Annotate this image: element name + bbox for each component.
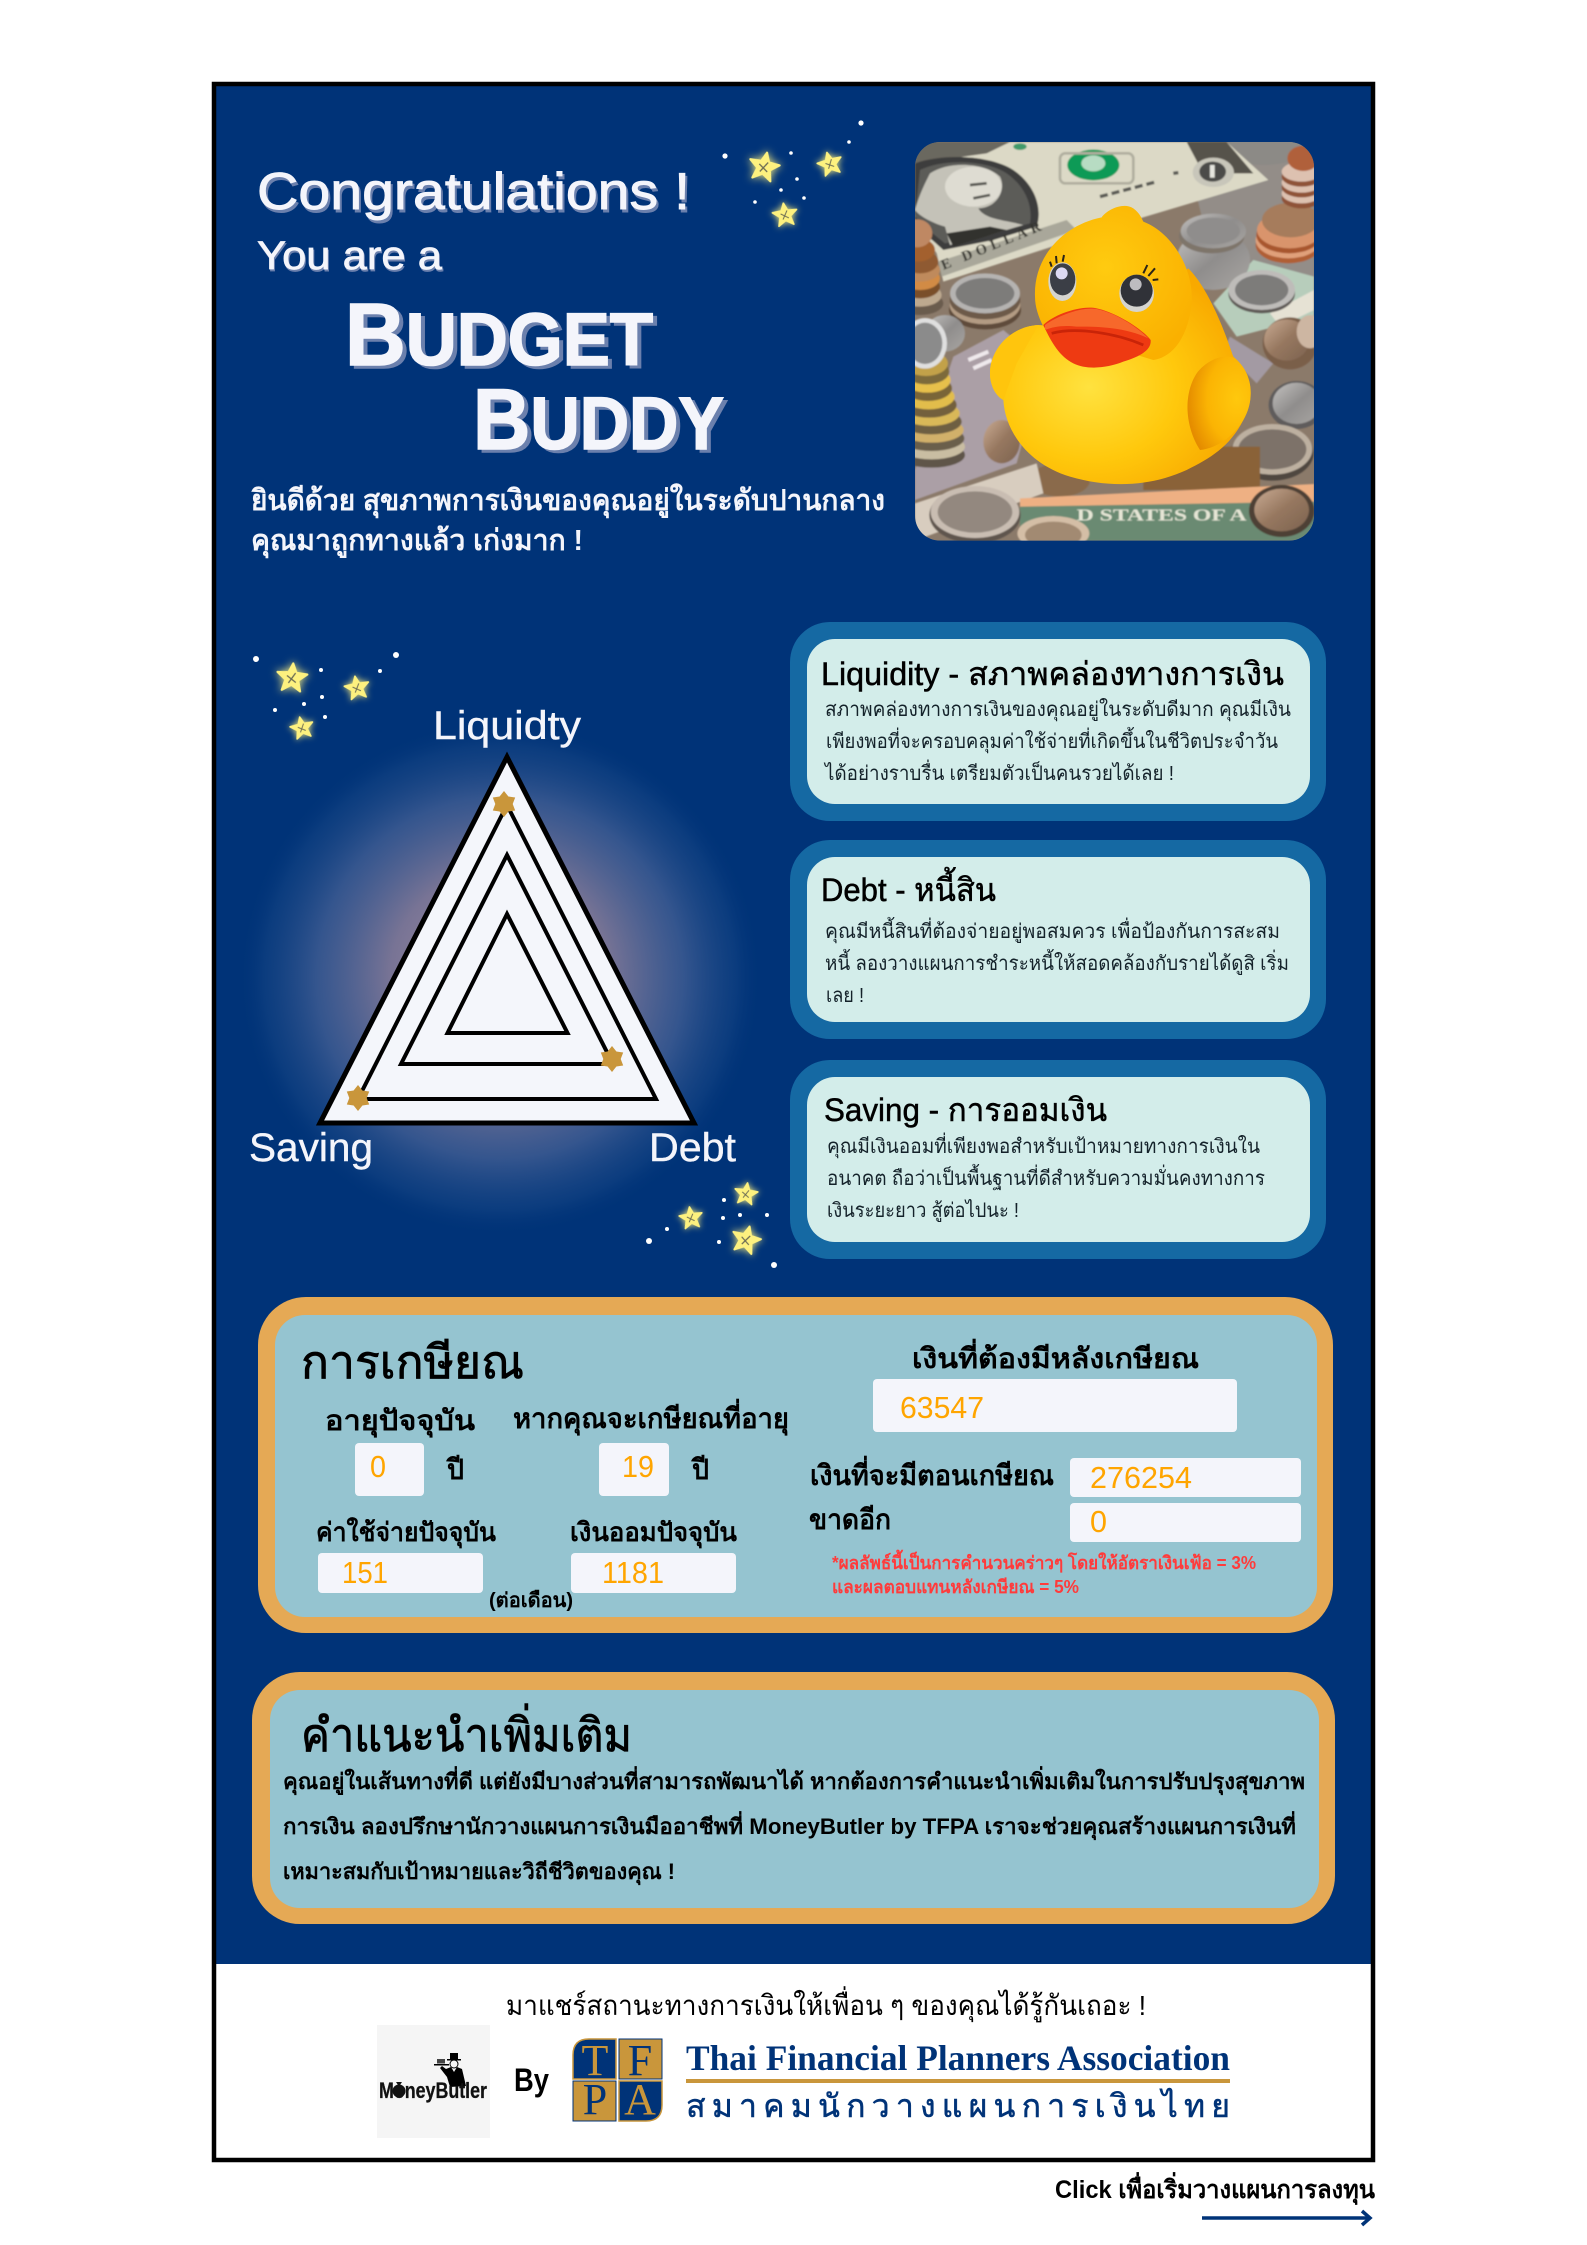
panel: liquidity	[790, 622, 1326, 821]
coins	[1178, 244, 1250, 290]
icon: money bag	[392, 2082, 406, 2098]
label: retire age: หากคุณจะเกษียณที่อายุ	[513, 1398, 789, 1436]
stars: radar right	[646, 1181, 777, 1268]
input: saving	[571, 1553, 736, 1593]
heading: saving: Saving - การออมเงิน	[824, 1092, 1107, 1128]
wordmark: tfpa english: Thai Financial Planners Association	[686, 2038, 1230, 2078]
input: will have: 276254	[1090, 1460, 1192, 1495]
panel: saving	[790, 1060, 1326, 1259]
gold coin stack	[915, 450, 966, 468]
axis label: saving: Saving	[249, 1126, 373, 1170]
call to action: Click เพื่อเริ่มวางแผนการลงทุน	[1055, 2172, 1375, 2206]
body: liquidity: สภาพคล่องทางการเงินของคุณอยู่ในระดับดีมาก คุณมีเงิน	[825, 698, 1291, 722]
input: shortfall	[1070, 1503, 1301, 1542]
share text: มาแชร์สถานะทางการเงินให้เพื่อน ๆ ของคุณได้รู้กันเถอะ !	[506, 1986, 1146, 2023]
input: current age: 0	[370, 1449, 386, 1484]
eyes	[1048, 262, 1076, 301]
heading: retirement: การเกษียณ	[301, 1336, 524, 1388]
input: saving: 1181	[602, 1555, 664, 1590]
lower bills	[915, 330, 1043, 500]
disclaimer	[832, 1549, 1256, 1597]
stars: radar left	[253, 652, 399, 740]
body: debt: คุณมีหนี้สินที่ต้องจ่ายอยู่พอสมควร เพื่อป้องกันการสะสม	[825, 917, 1280, 944]
radar chart	[238, 720, 762, 1236]
panel: debt	[790, 840, 1326, 1039]
input: shortfall: 0	[1090, 1504, 1107, 1539]
heading: advice: คำแนะนำเพิ่มเติม	[301, 1703, 632, 1761]
unit: years: ปี	[690, 1454, 709, 1485]
marker: liquidity	[493, 791, 515, 817]
marker: saving	[347, 1085, 369, 1111]
logo: tfpa: T	[582, 2036, 609, 2085]
body: liquidity: ได้อย่างราบรื่น เตรียมตัวเป็นคนรวยได้เลย !	[823, 759, 1174, 785]
body: saving: อนาคต ถือว่าเป็นพื้นฐานที่ดีสำหรับความมั่นคงทางการ	[827, 1164, 1265, 1190]
arrow	[1202, 2211, 1370, 2225]
disclaimer: *ผลลัพธ์นี้เป็นการคำนวนคร่าวๆ โดยให้อัตราเงินเฟ้อ = 3%	[832, 1549, 1256, 1573]
marker: debt	[601, 1046, 623, 1072]
title: buddy: BUDDY	[473, 372, 724, 468]
unit: years: ปี	[445, 1454, 464, 1485]
body: advice: เหมาะสมกับเป้าหมายและวิถีชีวิตของคุณ !	[283, 1859, 675, 1886]
banknote	[915, 142, 1268, 282]
title: budget: BUDGET	[345, 285, 653, 384]
input: expense	[318, 1553, 483, 1593]
frame border	[214, 84, 1373, 2160]
wordmark: MoneyButler	[379, 2078, 487, 2103]
label: shortfall: ขาดอีก	[809, 1504, 891, 1535]
input: expense: 151	[342, 1555, 388, 1590]
label: required after retirement: เงินที่ต้องมีหลังเกษียณ	[912, 1338, 1199, 1374]
body: advice: คุณอยู่ในเส้นทางที่ดี แต่ยังมีบางส่วนที่สามารถพัฒนาได้ หากต้องการคำแนะนำเพิ่มเติมในการปรับปรุงสุขภาพ	[283, 1765, 1305, 1796]
input: current age	[355, 1443, 424, 1496]
axis label: debt: Debt	[649, 1126, 736, 1170]
thai congratulations text: คุณมาถูกทางแล้ว เก่งมาก !	[251, 525, 583, 558]
input: retire age	[599, 1443, 669, 1496]
illustration: rubber duck on money	[915, 142, 1314, 541]
input: required: 63547	[900, 1390, 984, 1425]
logo: tfpa: P	[583, 2075, 607, 2124]
body: liquidity	[823, 698, 1291, 785]
logo: moneybutler	[377, 2025, 490, 2138]
body: debt: หนี้ ลองวางแผนการชำระหนี้ให้สอดคล้องกับรายได้ดูสิ เริ่ม	[825, 949, 1289, 976]
label: current age: อายุปัจจุบัน	[325, 1405, 475, 1438]
wordmark rule	[686, 2079, 1230, 2083]
heading: debt: Debt - หนี้สิน	[821, 867, 996, 908]
bottom bill	[915, 463, 1043, 541]
body: saving: คุณมีเงินออมที่เพียงพอสำหรับเป้าหมายทางการเงินใน	[827, 1132, 1260, 1159]
title: congratulations: Congratulations !	[257, 163, 690, 221]
by: By	[514, 2062, 549, 2098]
illustration: rubber duck on money: D STATES OF A	[1077, 506, 1247, 525]
thai congratulations text: ยินดีด้วย สุขภาพการเงินของคุณอยู่ในระดับปานกลาง	[251, 483, 885, 518]
triangle level 2	[401, 855, 613, 1064]
input: retire age: 19	[622, 1449, 654, 1484]
input: required	[873, 1379, 1237, 1432]
heading: liquidity: Liquidity - สภาพคล่องทางการเงิน	[821, 656, 1284, 692]
beak	[1043, 308, 1151, 368]
body: debt: เลย !	[826, 985, 864, 1007]
axis label: liquidty: Liquidty	[433, 704, 581, 748]
label: will have: เงินที่จะมีตอนเกษียณ	[810, 1455, 1054, 1491]
outer triangle	[320, 757, 694, 1123]
logo: tfpa	[573, 2036, 662, 2124]
panel: retirement	[258, 1297, 1333, 1633]
thai congratulations text	[251, 483, 885, 558]
navy panel	[214, 84, 1373, 1964]
icon: butler	[434, 2053, 466, 2087]
body: saving: เงินระยะยาว สู้ต่อไปนะ !	[827, 1199, 1019, 1223]
body: liquidity: เพียงพอที่จะครอบคลุมค่าใช้จ่ายที่เกิดขึ้นในชีวิตประจำวัน	[826, 727, 1278, 754]
triangle level 3	[358, 805, 656, 1099]
stars: top	[722, 120, 864, 227]
label: current expense: ค่าใช้จ่ายปัจจุบัน	[316, 1517, 496, 1549]
triangle level 1	[448, 914, 568, 1033]
disclaimer: และผลตอบแทนหลังเกษียณ = 5%	[832, 1577, 1079, 1597]
note: per month: (ต่อเดือน)	[489, 1589, 573, 1612]
logo: tfpa: F	[628, 2036, 652, 2085]
logo: tfpa: A	[624, 2075, 656, 2124]
panel: advice	[252, 1672, 1335, 1924]
illustration: rubber duck on money: E DOLLAR	[939, 219, 1044, 274]
body: debt	[825, 917, 1289, 1007]
body: advice: การเงิน ลองปรึกษานักวางแผนการเงินมืออาชีพที่ MoneyButler by TFPA เราจะช่วยคุณสร้างแผนการเงินที่	[283, 1810, 1296, 1841]
label: current saving: เงินออมปัจจุบัน	[570, 1517, 737, 1549]
body: saving	[827, 1132, 1265, 1223]
chart glow	[238, 720, 762, 1236]
duck	[990, 268, 1251, 484]
body: advice	[283, 1765, 1305, 1886]
wordmark: tfpa thai: สมาคมนักวางแผนการเงินไทย	[686, 2088, 1230, 2124]
subtitle: you are a: You are a	[257, 234, 443, 278]
input: will have	[1070, 1458, 1301, 1497]
